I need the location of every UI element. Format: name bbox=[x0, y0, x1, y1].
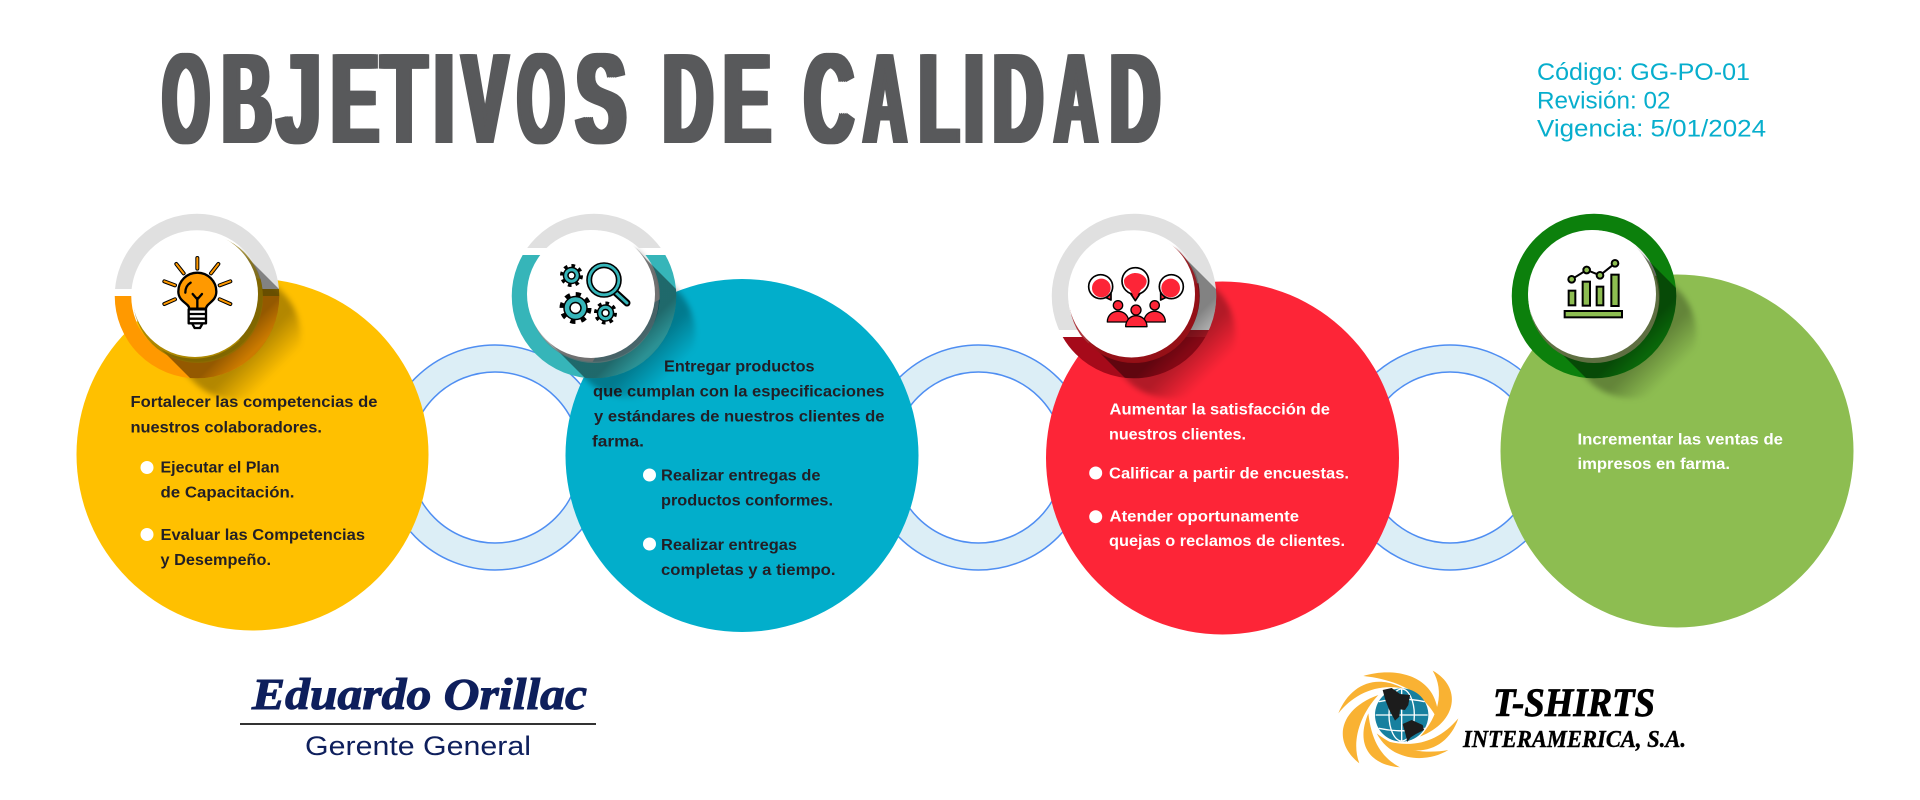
icon: lightbulb bbox=[164, 258, 230, 328]
text: entregas objective: farma. bbox=[592, 434, 644, 450]
title: E bbox=[723, 27, 770, 171]
logo emblem: globe and swirl bbox=[1338, 671, 1458, 767]
badge: gears and magnifier bbox=[520, 222, 695, 398]
text: entregas objective: que cumplan con la especificaciones bbox=[593, 384, 884, 400]
text: entregas objective: Realizar entregas bbox=[661, 537, 797, 554]
text: competencias objective: Ejecutar el Plan bbox=[160, 460, 280, 476]
connector ring 2 to 3 bbox=[866, 345, 1091, 570]
text: competencias objective: Fortalecer las competencias de bbox=[130, 394, 378, 411]
text: entregas objective: productos conformes. bbox=[661, 492, 833, 510]
document info: code, revision, validity: Código: GG-PO-01 bbox=[1537, 59, 1750, 86]
document info: code, revision, validity: Vigencia: 5/01/2024 bbox=[1537, 116, 1766, 142]
badge: lightbulb bbox=[123, 222, 301, 400]
title: O bbox=[517, 27, 564, 171]
title: O bbox=[163, 27, 210, 171]
title: I bbox=[427, 27, 460, 171]
text: entregas objective: completas y a tiempo. bbox=[661, 562, 836, 579]
logo: T-Shirts Interamerica: INTERAMERICA, S.A. bbox=[1462, 727, 1686, 753]
title: D bbox=[663, 27, 712, 171]
text: satisfaccion objective bbox=[1109, 402, 1349, 550]
title: L bbox=[919, 27, 958, 171]
text: competencias objective bbox=[130, 394, 378, 569]
text: ventas objective: impresos en farma. bbox=[1578, 456, 1730, 473]
text: satisfaccion objective: Atender oportunamente bbox=[1110, 508, 1299, 526]
title: B bbox=[223, 27, 272, 171]
text: entregas objective: Realizar entregas de bbox=[661, 468, 821, 484]
title: C bbox=[805, 27, 853, 171]
panel: competencias (yellow circle) bbox=[76, 222, 428, 630]
title: D bbox=[1110, 27, 1159, 171]
bullets: satisfaccion bbox=[1089, 466, 1102, 523]
text: competencias objective: de Capacitación. bbox=[160, 484, 294, 502]
document info: code, revision, validity: Revisión: 02 bbox=[1537, 88, 1670, 114]
signature block: Eduardo Orillac: Eduardo Orillac bbox=[251, 670, 587, 719]
connector ring 3 to 4 bbox=[1338, 345, 1562, 570]
bullets: competencias bbox=[140, 461, 154, 541]
text: ventas objective bbox=[1578, 432, 1783, 473]
title: J bbox=[277, 27, 321, 171]
title: A bbox=[1055, 27, 1097, 171]
signature block: Eduardo Orillac: Gerente General bbox=[305, 731, 531, 761]
bullets: entregas bbox=[643, 468, 656, 550]
text: ventas objective: Incrementar las ventas de bbox=[1578, 432, 1783, 448]
icon: people with speech bubbles bbox=[1089, 268, 1183, 327]
text: satisfaccion objective: Calificar a partir de encuestas. bbox=[1109, 466, 1349, 482]
text: competencias objective: y Desempeño. bbox=[160, 552, 271, 569]
icon: bar chart bbox=[1565, 260, 1622, 317]
panel: satisfaccion (red circle) bbox=[1046, 222, 1399, 634]
title: A bbox=[863, 27, 906, 171]
title: S bbox=[576, 27, 625, 171]
badge: bar chart bbox=[1520, 222, 1696, 398]
document info: code, revision, validity bbox=[1537, 59, 1766, 142]
title: I bbox=[957, 27, 990, 171]
text: entregas objective bbox=[592, 358, 885, 579]
text: entregas objective: Entregar productos bbox=[664, 358, 814, 376]
text: satisfaccion objective: nuestros clientes. bbox=[1109, 426, 1246, 444]
panel: entregas (teal circle) bbox=[520, 222, 918, 632]
connector ring 1 to 2 bbox=[382, 345, 608, 570]
text: competencias objective: nuestros colaboradores. bbox=[130, 420, 322, 436]
logo: T-Shirts Interamerica: T-SHIRTS bbox=[1493, 680, 1655, 725]
text: competencias objective: Evaluar las Competencias bbox=[160, 527, 365, 544]
logo: T-Shirts Interamerica bbox=[1338, 671, 1686, 767]
icon: gears and magnifier bbox=[562, 263, 627, 322]
text: satisfaccion objective: quejas o reclamos de clientes. bbox=[1109, 533, 1345, 550]
signature block: Eduardo Orillac bbox=[240, 670, 596, 761]
text: satisfaccion objective: Aumentar la satisfacción de bbox=[1110, 402, 1330, 418]
panel: ventas (green circle) bbox=[1500, 222, 1854, 628]
title: T bbox=[380, 27, 428, 171]
title: V bbox=[462, 27, 507, 171]
title: E bbox=[332, 27, 378, 171]
badge: people with speech bubbles bbox=[1060, 222, 1235, 398]
text: entregas objective: y estándares de nuestros clientes de bbox=[594, 408, 885, 426]
title bbox=[162, 27, 1160, 171]
title: D bbox=[993, 27, 1043, 171]
